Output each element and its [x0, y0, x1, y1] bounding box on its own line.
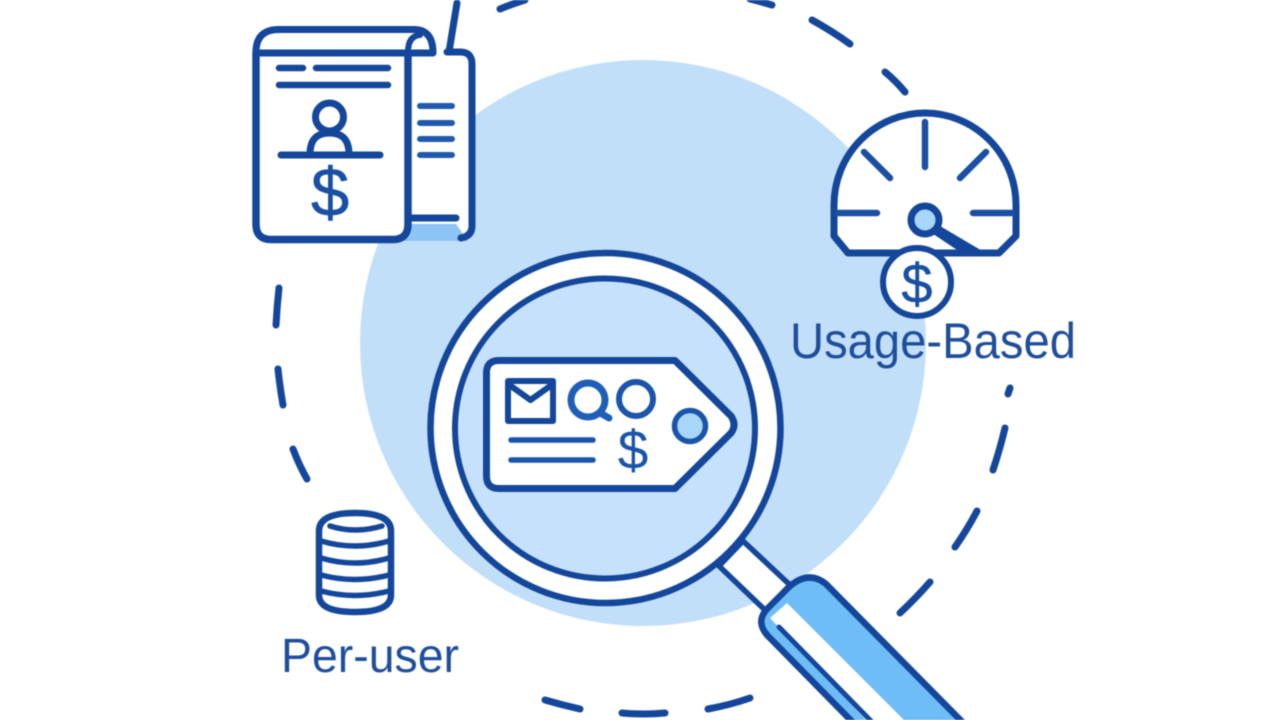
envelope icon [508, 381, 553, 421]
background circle [360, 60, 926, 626]
price tag [486, 360, 734, 488]
search circle icon [571, 383, 605, 417]
icon: usage gauge [834, 113, 1016, 316]
handle grip [761, 577, 990, 720]
back page outline [410, 3, 472, 238]
dashed orbit ring [276, 0, 1010, 714]
tag dollar sign: $ [618, 419, 648, 481]
icon: coin stack [319, 513, 391, 612]
icon: subscription document [256, 3, 472, 241]
dollar sign: $ [311, 154, 349, 231]
circle icon [619, 382, 653, 416]
magnifying glass [430, 253, 990, 720]
label: usage-based: Usage-Based [790, 313, 1076, 369]
gauge dial [834, 113, 1016, 253]
document front page [256, 52, 408, 240]
stack layers [321, 526, 389, 596]
document back page [410, 52, 472, 238]
divider line [281, 152, 380, 158]
handle neck [719, 541, 790, 611]
lens glass [455, 278, 755, 578]
stack outline [319, 513, 391, 612]
magnifier glyph icon [602, 414, 609, 418]
gauge ticks [838, 122, 1012, 213]
coin dollar sign: $ [901, 252, 933, 315]
gauge hub [911, 206, 939, 234]
user shoulders [310, 133, 349, 154]
coin [883, 248, 951, 316]
tag hole [674, 410, 706, 442]
handle inner line [779, 627, 872, 720]
user head [316, 103, 344, 131]
handle highlight [770, 603, 917, 720]
lens rim [430, 253, 780, 603]
document top roll [256, 30, 433, 53]
shaded page base [400, 224, 468, 241]
gauge needle [932, 226, 982, 252]
tag body [486, 360, 734, 488]
tag text lines [511, 440, 593, 460]
roll curl [408, 35, 420, 52]
label: per-user: Per-user [281, 630, 459, 683]
document text lines [279, 68, 388, 85]
side page lines [420, 106, 452, 155]
